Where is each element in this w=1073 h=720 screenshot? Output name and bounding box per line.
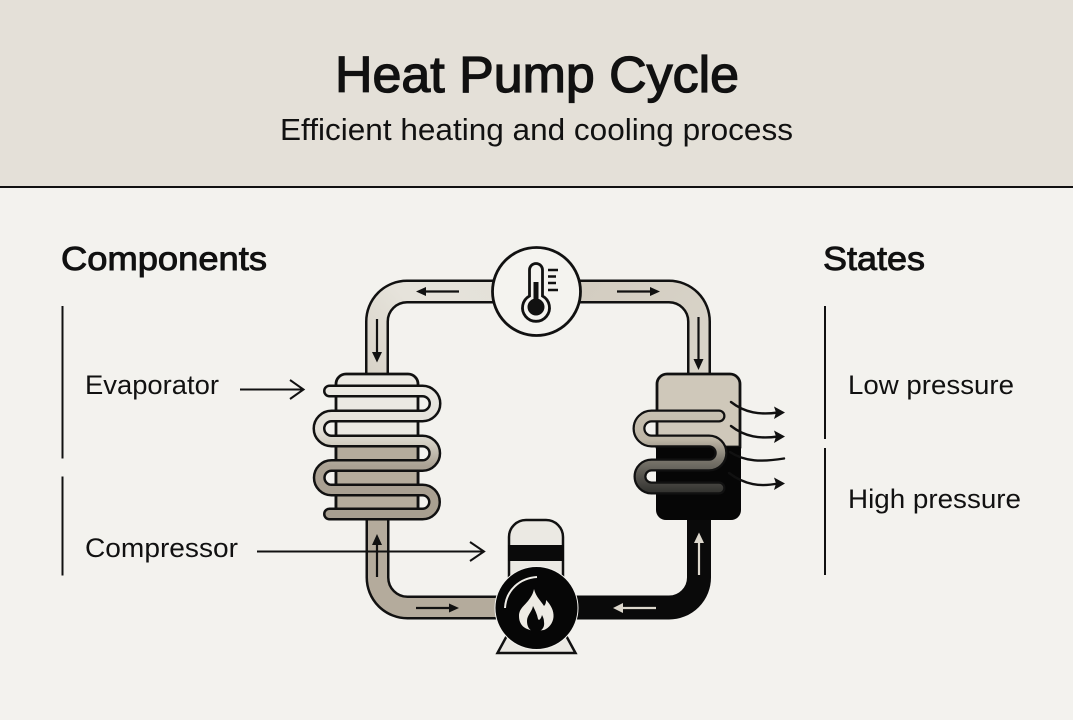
- thermometer gauge: [492, 248, 580, 336]
- flow arrows: bottom: [372, 532, 704, 613]
- flow arrows: top: [372, 287, 704, 370]
- arrow: compressor pointer: [257, 542, 484, 561]
- compressor dome: [508, 520, 564, 580]
- pipe: bottom right: [575, 515, 699, 608]
- pipe: top left: [377, 292, 500, 380]
- condenser: [639, 374, 741, 520]
- panel: components: [61, 240, 267, 576]
- panel: states: [823, 240, 1021, 575]
- evaporator: [319, 374, 435, 514]
- heading: states: States: [823, 240, 925, 277]
- compressor base: [498, 630, 576, 653]
- icon: thermometer: [522, 264, 558, 321]
- label: compressor: Compressor: [85, 533, 238, 563]
- title: Heat Pump Cycle: [335, 46, 739, 103]
- label: low pressure: Low pressure: [848, 370, 1014, 400]
- divider: states: [824, 306, 826, 575]
- motor highlight: [505, 577, 537, 608]
- heat output arrows: [729, 402, 785, 490]
- condenser tank: [656, 374, 741, 520]
- divider: components: [62, 306, 64, 576]
- pipe: bottom left: [378, 510, 500, 608]
- compressor: [495, 520, 578, 653]
- compressor motor: [495, 566, 578, 650]
- header band: [0, 0, 1073, 188]
- label: evaporator: Evaporator: [85, 370, 219, 400]
- pipe: top right: [575, 292, 699, 380]
- icon: flame: [519, 589, 554, 632]
- evaporator coil: [319, 391, 435, 514]
- heading: components: Components: [61, 240, 267, 277]
- evaporator tank: [336, 374, 418, 511]
- arrow: evaporator pointer: [240, 380, 304, 399]
- condenser coil: [639, 416, 721, 488]
- label: high pressure: High pressure: [848, 484, 1021, 514]
- subtitle: Efficient heating and cooling process: [280, 112, 793, 147]
